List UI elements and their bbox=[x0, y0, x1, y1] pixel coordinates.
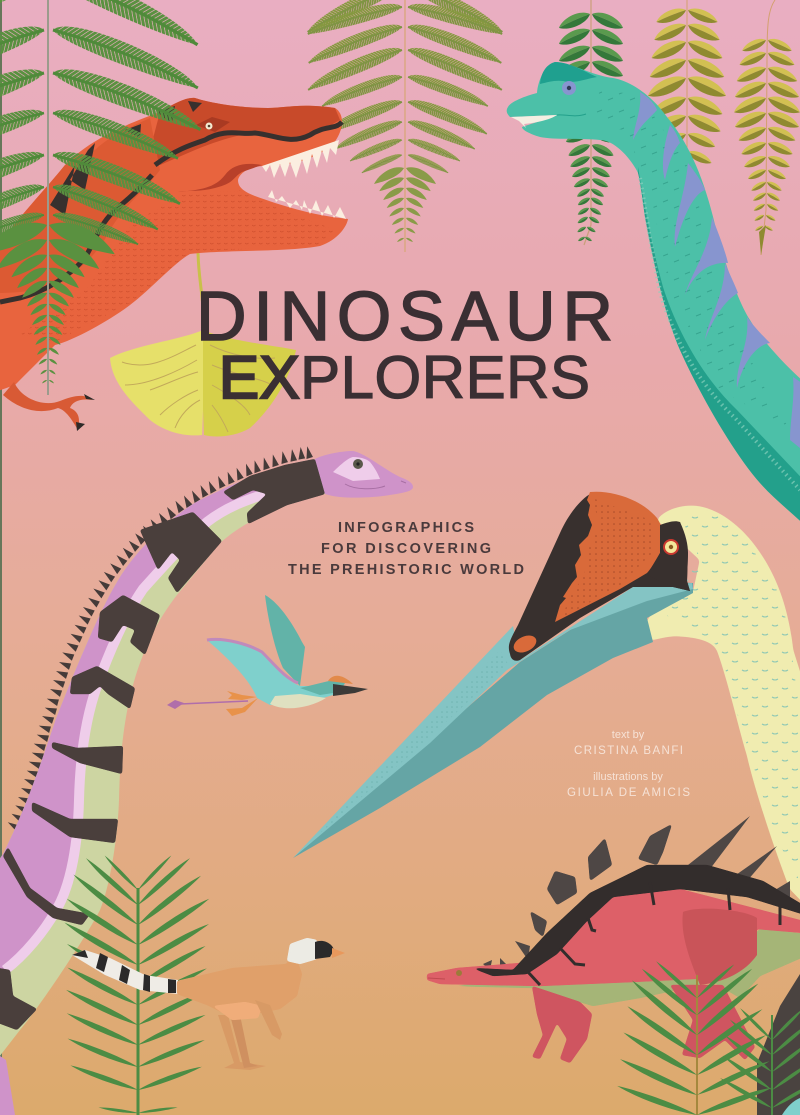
frond: centre olive fern bbox=[303, 0, 507, 252]
wing edge bbox=[207, 639, 298, 683]
ginkgo leaf bbox=[110, 250, 296, 437]
dorsal stripe bbox=[472, 865, 800, 976]
legs bbox=[218, 1015, 266, 1070]
arm bbox=[255, 1000, 282, 1040]
sharp plates bbox=[483, 816, 790, 970]
crest bbox=[328, 676, 353, 684]
nostril bbox=[511, 632, 539, 656]
credits: GIULIA DE AMICIS bbox=[567, 787, 690, 799]
body bbox=[427, 889, 800, 986]
far wing bbox=[265, 595, 305, 686]
neck bbox=[300, 680, 345, 695]
shoulder shade bbox=[0, 118, 160, 293]
beak bbox=[332, 948, 345, 958]
mauve upper neck bbox=[0, 459, 317, 985]
eye bbox=[663, 539, 679, 555]
frond: lower right corner bbox=[719, 1007, 800, 1115]
beak bbox=[333, 684, 368, 696]
black face bbox=[315, 941, 334, 959]
frond: oval green behind long-neck bbox=[556, 0, 626, 245]
eye bbox=[196, 117, 230, 132]
stegosaur bbox=[427, 816, 800, 1063]
neck sage base bbox=[0, 459, 325, 1075]
upper skull bbox=[150, 98, 340, 165]
lower beak bbox=[293, 581, 693, 858]
hip shade bbox=[682, 909, 757, 985]
frond: left fern over t-rex bbox=[0, 0, 206, 395]
credits: illustrations by bbox=[593, 771, 663, 783]
frond: golden right bbox=[731, 0, 800, 255]
t-rex bbox=[0, 98, 348, 431]
front leg bbox=[532, 986, 592, 1063]
eye bbox=[353, 459, 363, 469]
black head bbox=[509, 494, 690, 661]
orange crest bbox=[555, 492, 662, 622]
pale pink stripe bbox=[5, 492, 272, 970]
crest bbox=[540, 62, 597, 84]
skin dashes bbox=[590, 90, 790, 430]
near wing bbox=[207, 639, 333, 705]
subtitle bbox=[288, 520, 524, 578]
tail bbox=[167, 700, 248, 709]
frond: golden middle bbox=[645, 0, 729, 180]
eye bbox=[562, 81, 576, 95]
upper beak bbox=[293, 583, 693, 858]
white ruff bbox=[287, 938, 317, 964]
foot bbox=[3, 382, 92, 430]
head bbox=[315, 451, 413, 498]
subtitle: INFOGRAPHICS bbox=[338, 520, 474, 536]
title: EXPLORERS bbox=[219, 344, 590, 411]
spikes bbox=[14, 455, 318, 838]
subtitle: FOR DISCOVERING bbox=[321, 541, 491, 557]
purple stripes bbox=[633, 92, 800, 460]
title bbox=[196, 277, 613, 411]
small feathered dinosaur bbox=[72, 938, 345, 1070]
head black behind eye bbox=[647, 522, 690, 591]
body bbox=[177, 949, 302, 1018]
neck scales bbox=[20, 190, 335, 342]
small flying pterosaur bbox=[167, 595, 368, 716]
frond: lower right bbox=[616, 960, 773, 1115]
neck bbox=[647, 506, 800, 915]
tail bbox=[72, 950, 178, 994]
subtitle: THE PREHISTORIC WORLD bbox=[288, 562, 524, 578]
title: DINOSAUR bbox=[196, 277, 613, 355]
belly bbox=[270, 694, 326, 708]
feet bbox=[226, 691, 258, 716]
teeth bbox=[262, 140, 339, 178]
long-neck teal dinosaur bbox=[507, 62, 800, 535]
crested pterosaur with long beak bbox=[293, 492, 800, 915]
underside band bbox=[638, 167, 800, 535]
rounded plates bbox=[530, 824, 672, 937]
credits: text by bbox=[612, 729, 645, 741]
teeth bbox=[511, 115, 557, 128]
dark leg at lower right bbox=[757, 974, 800, 1115]
belly bbox=[213, 1002, 262, 1020]
belly bbox=[443, 929, 800, 1006]
dark bands bbox=[0, 459, 325, 1030]
frond: lower left palm bbox=[63, 854, 211, 1115]
left edge strip bbox=[0, 0, 2, 1115]
eye bbox=[456, 970, 462, 976]
lower body mauve bbox=[0, 1056, 15, 1115]
credits: CRISTINA BANFI bbox=[574, 745, 683, 757]
jaw line bbox=[178, 164, 262, 192]
credits bbox=[567, 729, 690, 799]
hind leg bbox=[670, 985, 755, 1060]
purple sauropod bbox=[0, 451, 413, 1115]
black markings bbox=[155, 122, 342, 165]
